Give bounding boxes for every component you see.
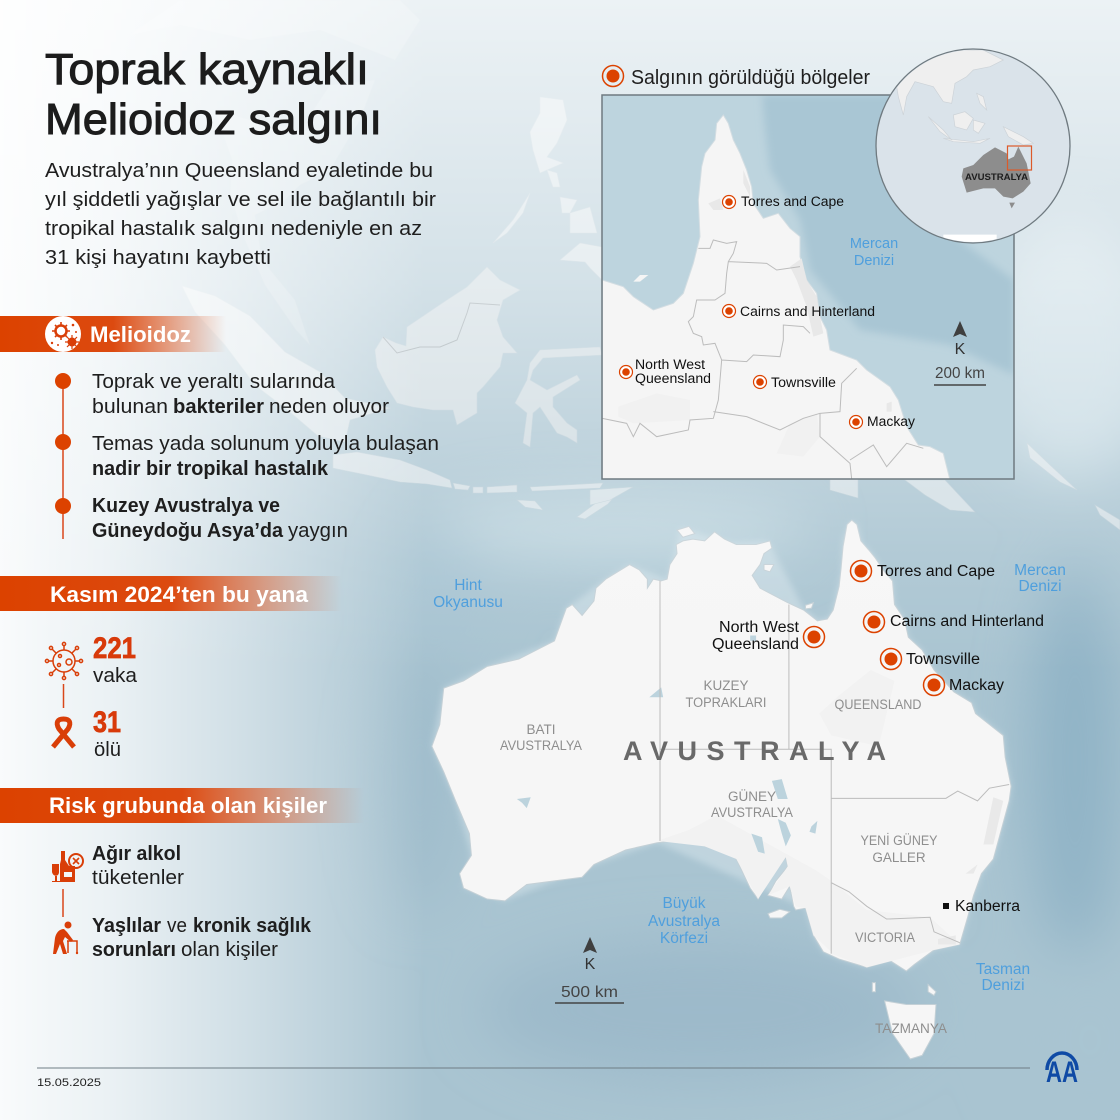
stats <box>45 632 138 761</box>
sea labels: Denizi <box>981 977 1025 994</box>
north arrow and scale: main map <box>555 937 624 1003</box>
Borneo border <box>383 303 500 353</box>
facts list: Kuzey Avustralya ve <box>92 495 280 517</box>
Indochina and Malay peninsula <box>130 0 420 345</box>
risk list: kronik sağlık <box>193 915 312 937</box>
section bar: Melioidoz <box>0 316 226 352</box>
risk list: olan kişiler <box>181 939 278 961</box>
intro text: tropikal hastalık salgını nedeniyle en az <box>45 218 422 240</box>
outbreak markers on main map: Torres and Cape <box>877 563 995 580</box>
legend: Salgının görüldüğü bölgeler <box>631 67 870 89</box>
risk list: Ağır alkol <box>92 843 181 865</box>
outbreak markers on main map <box>712 560 1044 696</box>
inset sea label: Denizi <box>854 253 894 269</box>
logo: AA <box>1046 1053 1078 1089</box>
risk list: sorunları <box>92 939 176 961</box>
inset region borders <box>602 240 923 479</box>
facts list: neden oluyor <box>269 396 389 418</box>
north arrow and scale: main map: 500 km <box>561 984 618 1001</box>
sea labels: Avustralya <box>648 913 720 930</box>
facts list: Güneydoğu Asya’da <box>92 520 284 542</box>
inset markers: Townsville <box>771 375 836 390</box>
risk list <box>52 843 312 961</box>
main map state labels: YENİ GÜNEY <box>860 833 938 848</box>
date: 15.05.2025 <box>37 1077 101 1089</box>
globe Australia <box>962 147 1031 208</box>
main map state labels: BATI <box>526 722 556 737</box>
facts list: bakteriler <box>173 396 264 418</box>
intro text: Avustralya’nın Queensland eyaletinde bu <box>45 160 433 182</box>
outbreak markers on main map: Queensland <box>712 636 799 653</box>
inset markers: Mackay <box>867 414 915 429</box>
gulf island <box>633 275 648 282</box>
icon: virus <box>45 642 83 680</box>
inset markers: Torres and Cape <box>741 194 844 209</box>
inset north arrow and scale: 200 km <box>935 365 985 382</box>
main map state labels: GÜNEY <box>728 789 776 804</box>
inset markers: North West <box>635 357 705 372</box>
Lesser Sunda islands <box>453 483 620 519</box>
north arrow and scale: main map: K <box>585 956 596 973</box>
map: Southeast Asia islands <box>130 0 1120 530</box>
section bar: since November 2024: Kasım 2024’ten bu yana <box>50 582 309 607</box>
locator globe: AVUSTRALYA <box>965 172 1028 183</box>
outbreak markers on main map: Cairns and Hinterland <box>890 613 1044 630</box>
capital: Kanberra: Kanberra <box>955 898 1020 915</box>
Borneo <box>375 267 520 425</box>
Sumatra <box>182 286 390 442</box>
section bar: since November 2024 <box>0 576 342 611</box>
locator box <box>1008 146 1032 170</box>
locator globe <box>876 49 1070 247</box>
inset markers: Cairns and Hinterland <box>740 304 875 319</box>
islands <box>677 526 936 1059</box>
Philippines <box>493 97 602 280</box>
state borders <box>660 581 1009 954</box>
inset markers: Queensland <box>635 371 711 386</box>
sea labels: Hint <box>454 577 482 594</box>
Sulawesi <box>515 347 602 447</box>
sea labels: Büyük <box>662 895 706 912</box>
inset north arrow and scale <box>934 321 986 385</box>
outbreak markers on main map: North West <box>719 619 800 636</box>
intro text <box>45 160 436 269</box>
stats: vaka <box>93 665 138 687</box>
main map state labels <box>500 678 947 1036</box>
sea labels: Mercan <box>1014 562 1066 579</box>
inset sea label <box>850 236 898 269</box>
facts list: nadir bir tropikal hastalık <box>92 458 329 480</box>
facts list: Toprak ve yeraltı sularında <box>92 371 336 393</box>
section bar: risk group: Risk grubunda olan kişiler <box>49 793 327 818</box>
country label: AVUSTRALYA <box>623 736 886 766</box>
intro text: yıl şiddetli yağışlar ve sel ile bağlantılı bir <box>45 189 436 211</box>
sea labels: Körfezi <box>660 930 708 947</box>
facts list <box>55 371 439 542</box>
risk list: Yaşlılar <box>92 915 161 937</box>
section bar: Melioidoz: Melioidoz <box>90 322 191 347</box>
section bar: risk group <box>0 788 364 823</box>
inset land <box>602 115 950 480</box>
facts list: Temas yada solunum yoluyla bulaşan <box>92 433 439 455</box>
sea labels <box>433 562 1066 994</box>
islands south east <box>590 443 1077 512</box>
icon: alcohol <box>52 851 83 882</box>
risk list: ve <box>167 915 187 937</box>
Java <box>333 452 452 488</box>
sea labels: Tasman <box>976 961 1030 978</box>
inset markers <box>620 194 915 429</box>
sea labels: Denizi <box>1018 578 1062 595</box>
main map state labels: KUZEY <box>703 678 749 693</box>
mainland outline <box>432 520 1011 971</box>
lakes <box>517 635 817 854</box>
facts list: bulunan <box>92 396 168 418</box>
icon: bacteria <box>45 316 81 352</box>
inset land tint <box>708 170 892 412</box>
sea labels: Okyanusu <box>433 594 503 611</box>
main map state labels: TOPRAKLARI <box>686 695 766 710</box>
inset map: Queensland <box>602 95 1014 480</box>
outbreak markers on main map: Mackay <box>949 677 1004 694</box>
main map state labels: TAZMANYA <box>875 1021 947 1036</box>
globe land <box>897 50 1033 145</box>
antarctica <box>943 234 997 242</box>
title: Melioidoz salgını <box>45 95 382 144</box>
map: Australia <box>432 520 1011 1059</box>
main map state labels: VICTORIA <box>855 930 915 945</box>
outbreak markers on main map: Townsville <box>906 651 980 668</box>
logo: AA: AA <box>1046 1056 1078 1089</box>
stats: ölü <box>94 739 121 761</box>
intro text: 31 kişi hayatını kaybetti <box>45 247 271 269</box>
main map state labels: AVUSTRALYA <box>500 738 582 753</box>
footer rule <box>37 1067 1030 1069</box>
icon: ribbon <box>53 719 74 747</box>
main map state labels: QUEENSLAND <box>834 697 922 712</box>
title: Toprak kaynaklı <box>45 45 369 94</box>
land tint <box>657 670 960 967</box>
main map state labels: GALLER <box>872 850 926 865</box>
main map state labels: AVUSTRALYA <box>711 805 793 820</box>
stats: 31 <box>93 706 121 739</box>
title <box>45 45 382 144</box>
facts list: yaygın <box>288 520 348 542</box>
risk list: tüketenler <box>92 867 184 889</box>
icon: elderly person <box>53 922 78 954</box>
stats: 221 <box>93 632 136 665</box>
inset north arrow and scale: K <box>955 341 966 358</box>
inset sea label: Mercan <box>850 236 898 252</box>
